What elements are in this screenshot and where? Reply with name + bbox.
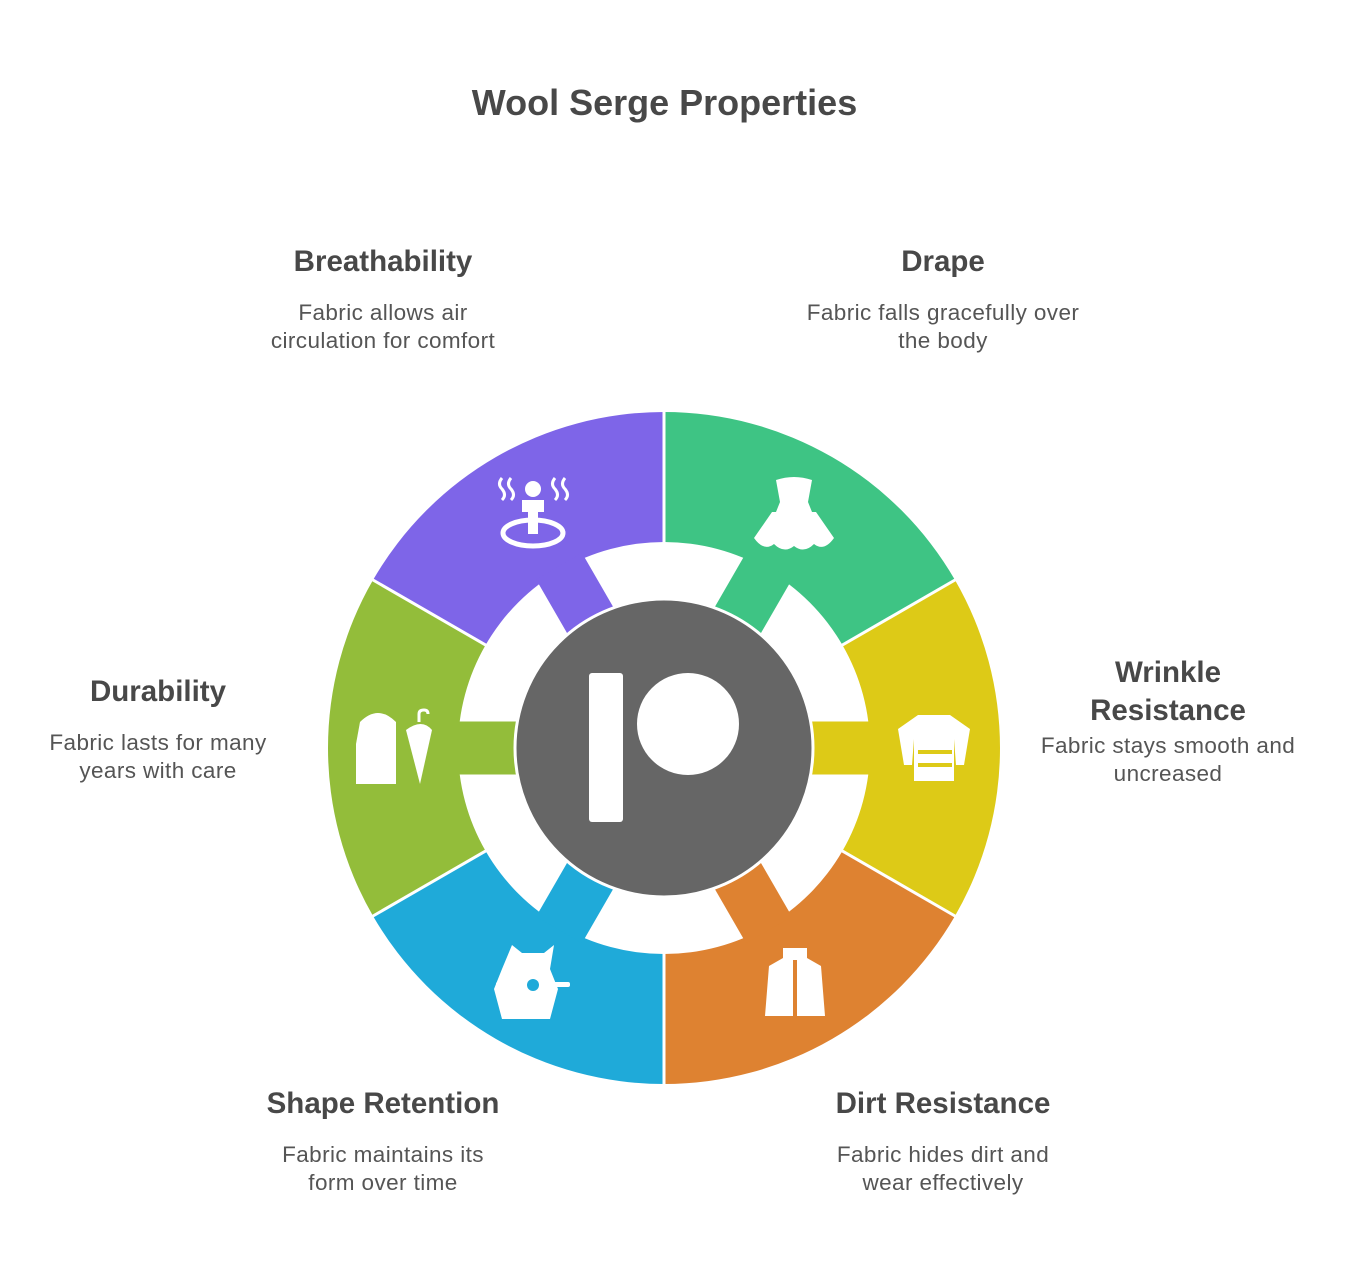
label: breathability: circulation for comfort: [271, 328, 495, 353]
icon: durability raincoat umbrella: [356, 710, 432, 784]
label: dirt resistance: [836, 1087, 1050, 1195]
icon: dirt vest: [765, 948, 825, 1016]
label: dirt resistance: Fabric hides dirt and: [837, 1142, 1049, 1167]
label: durability: [49, 675, 267, 783]
icon: wrinkle sweater: [898, 715, 970, 781]
label: shape retention: [267, 1087, 499, 1195]
segment: breathability: [373, 328, 723, 698]
label: drape: the body: [898, 328, 988, 353]
segment: wrinkle resistance: [750, 580, 1100, 950]
label: durability: years with care: [79, 758, 237, 783]
label: breathability: Breathability: [294, 245, 472, 278]
label: wrinkle resistance: [1041, 656, 1295, 786]
label: breathability: [271, 245, 495, 353]
segment: shape retention: [373, 847, 664, 1084]
segment: durability: [228, 546, 578, 916]
label: wrinkle resistance: uncreased: [1114, 761, 1222, 786]
label: shape retention: form over time: [308, 1170, 458, 1195]
label: shape retention: Shape Retention: [267, 1087, 499, 1120]
label: wrinkle resistance: Fabric stays smooth and: [1041, 733, 1295, 758]
label: drape: Drape: [901, 245, 985, 278]
icon: shape retention corset: [494, 945, 570, 1019]
label: drape: Fabric falls gracefully over: [807, 300, 1079, 325]
segment: drape: [664, 412, 955, 649]
label: dirt resistance: Dirt Resistance: [836, 1087, 1050, 1120]
label: dirt resistance: wear effectively: [862, 1170, 1024, 1195]
label: breathability: Fabric allows air: [298, 300, 468, 325]
label: durability: Fabric lasts for many: [49, 730, 267, 755]
label: wrinkle resistance: Resistance: [1090, 694, 1246, 727]
label: shape retention: Fabric maintains its: [282, 1142, 484, 1167]
title: Wool Serge Properties: [472, 82, 857, 123]
label: durability: Durability: [90, 675, 226, 708]
icon: drape dress: [754, 477, 834, 550]
label: wrinkle resistance: Wrinkle: [1115, 656, 1221, 689]
label: drape: [807, 245, 1079, 353]
segment: dirt resistance: [605, 798, 955, 1168]
icon: breathability: [500, 478, 568, 546]
center circle logo: [515, 599, 813, 897]
